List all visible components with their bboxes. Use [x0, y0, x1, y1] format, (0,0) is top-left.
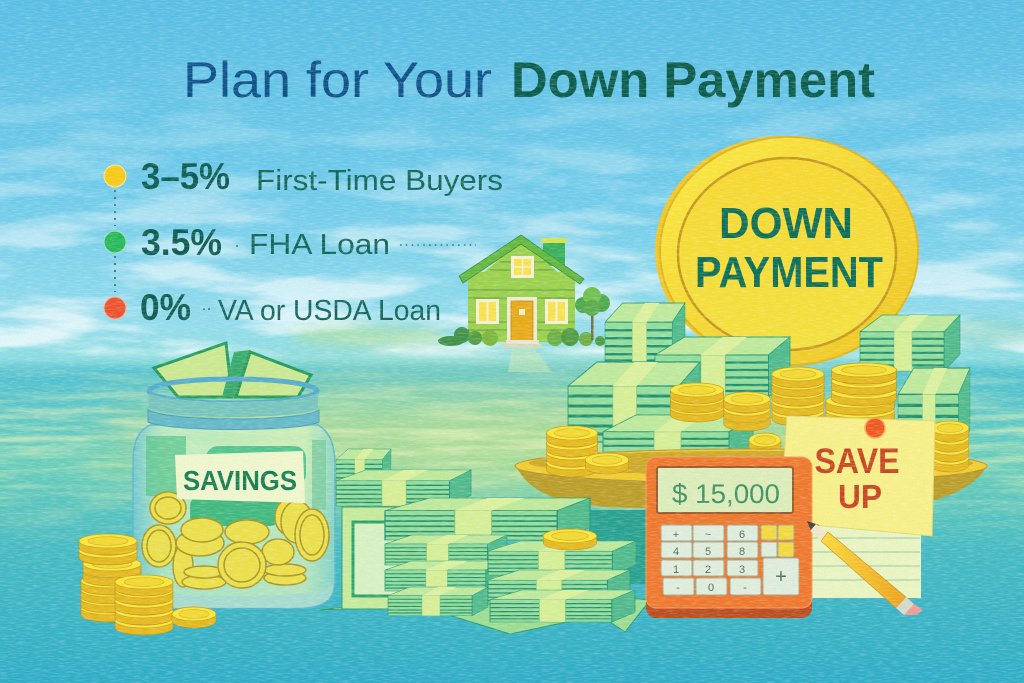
- option: VA or USDA loan: 0%: [140, 287, 191, 328]
- key labels: 8: [739, 546, 745, 558]
- option: FHA loan: [104, 222, 476, 263]
- jar neck: [148, 379, 319, 430]
- tray of cash and coins: [515, 303, 987, 508]
- sticky note: save up: [780, 416, 935, 598]
- big gold coin: down payment: PAYMENT: [695, 248, 883, 297]
- icon: calculator: [646, 457, 812, 618]
- clouds: [0, 60, 1024, 360]
- icon: pencil: [807, 521, 923, 615]
- save up text: UP: [838, 478, 882, 515]
- timeline dots connector: [114, 190, 116, 292]
- savings jar: [133, 343, 335, 608]
- big gold coin: down payment: [655, 136, 918, 365]
- list of down payment options: [104, 156, 503, 328]
- option: first-time buyers: 3–5%: [141, 156, 230, 197]
- key labels: 4: [673, 546, 679, 558]
- option: VA or USDA loan: [104, 287, 441, 328]
- bills in jar mouth: [154, 343, 311, 397]
- big gold coin: down payment: DOWN: [719, 199, 853, 248]
- front coin stacks: [546, 421, 969, 477]
- calculator keys: [661, 525, 799, 595]
- key labels: 0: [708, 582, 714, 594]
- option: first-time buyers: First-Time Buyers: [256, 165, 503, 197]
- key labels: -: [676, 582, 680, 594]
- right cash stack with coin: [488, 529, 636, 622]
- distant tree line: [290, 318, 1024, 346]
- option: FHA loan: 3.5%: [141, 222, 222, 263]
- title: Down Payment: [511, 52, 875, 108]
- key labels: 2: [705, 564, 711, 576]
- key labels: +: [673, 529, 679, 541]
- jar base: [136, 585, 333, 608]
- option: first-time buyers: [104, 156, 503, 197]
- icon: calculator: $ 15,000: [672, 479, 780, 509]
- save up text: SAVE: [814, 442, 900, 481]
- pin: [865, 418, 885, 438]
- key labels: 6: [739, 529, 745, 541]
- savings label: [175, 451, 305, 503]
- lined paper: [808, 520, 921, 598]
- option: FHA loan: FHA Loan: [249, 229, 390, 261]
- foreground cash piles: [320, 449, 650, 634]
- loose bills: [320, 592, 650, 634]
- dark cash stack: [589, 510, 649, 584]
- yellow note: [780, 416, 935, 536]
- walkway: [508, 348, 552, 372]
- key labels: 5: [705, 546, 711, 558]
- back cash stacks: [568, 303, 970, 471]
- title: Plan for Your: [183, 52, 492, 108]
- gold tray: [515, 449, 987, 508]
- key labels: [673, 529, 787, 594]
- icon: green house: [438, 235, 610, 348]
- savings label: SAVINGS: [183, 465, 297, 496]
- key labels: -: [743, 582, 747, 594]
- jar body: [133, 425, 335, 608]
- key labels: ~: [705, 529, 711, 541]
- key labels: +: [775, 566, 787, 588]
- flat banknote: [342, 507, 403, 609]
- title: [183, 52, 875, 108]
- key labels: 1: [673, 564, 679, 576]
- key labels: 3: [739, 564, 745, 576]
- coin stacks left of jar: [79, 534, 216, 635]
- coin stacks: [670, 363, 896, 464]
- option: VA or USDA loan: VA or USDA Loan: [218, 295, 441, 327]
- cash inside jar: [146, 436, 326, 526]
- cash stack back left: [336, 449, 471, 506]
- save up text: [814, 442, 900, 515]
- large cash stack: [385, 498, 590, 616]
- coins inside jar: [142, 492, 329, 589]
